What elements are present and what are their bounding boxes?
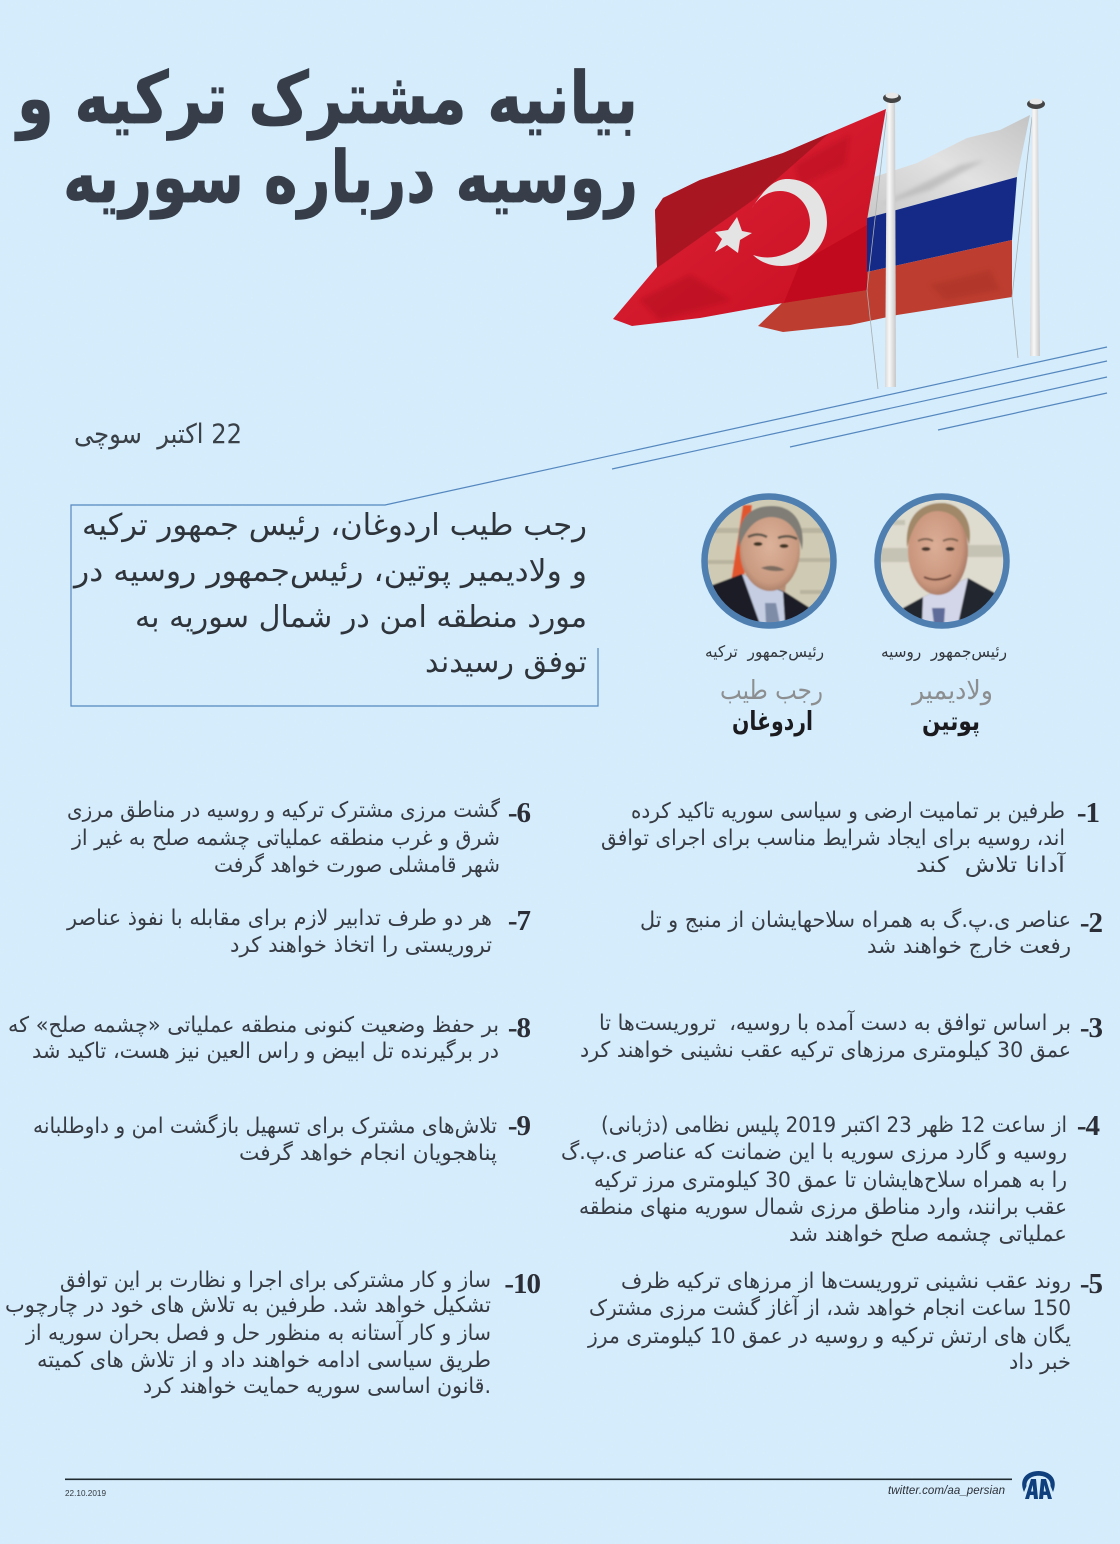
item 4: عقب برانند، وارد مناطق مرزی شمال سوریه منهای منطقه xyxy=(579,1195,1067,1220)
flag: Russia xyxy=(758,115,1030,332)
item 1 xyxy=(601,797,1099,878)
item 10: ساز و کار مشترکی برای اجرا و نظارت بر این توافق xyxy=(60,1268,491,1293)
icon: Anadolu Agency logo xyxy=(1022,1471,1055,1499)
item 2 xyxy=(640,907,1102,959)
item 5: یگان های ارتش ترکیه و روسیه در عمق 10 کیلومتری مرز xyxy=(587,1323,1071,1349)
item 6 xyxy=(67,797,530,878)
item 9 xyxy=(33,1110,530,1166)
intro text block: رجب طیب اردوغان، رئیس جمهور ترکیه xyxy=(82,508,587,543)
item 5 xyxy=(587,1268,1102,1375)
item 5: -5 xyxy=(1080,1268,1102,1300)
caption: Erdogan: رجب طیب xyxy=(720,676,823,706)
item 1: طرفین بر تمامیت ارضی و سیاسی سوریه تاکید کرده xyxy=(631,799,1065,824)
item 8: بر حفظ وضعیت کنونی منطقه عملیاتی «چشمه صلح» که xyxy=(8,1013,499,1038)
footer date: 22.10.2019 xyxy=(65,1488,106,1498)
caption: Putin: ولادیمیر xyxy=(910,676,993,706)
date line: 22 اکتبر سوچی xyxy=(74,419,242,450)
intro text block: و ولادیمیر پوتین، رئیس‌جمهور روسیه در xyxy=(72,554,587,589)
item 10: تشکیل خواهد شد. طرفین به تلاش های خود در چارچوب xyxy=(5,1293,491,1318)
item 2: -2 xyxy=(1080,907,1102,939)
title xyxy=(15,56,638,220)
item 6: -6 xyxy=(508,797,530,829)
item 1: -1 xyxy=(1077,797,1099,829)
footer rule xyxy=(65,1478,1012,1480)
item 2: رفعت خارج خواهند شد xyxy=(867,934,1071,959)
intro text block: مورد منطقه امن در شمال سوریه به xyxy=(135,600,587,635)
item 5: 150 ساعت انجام خواهد شد، از آغاز گشت مرزی مشترک xyxy=(589,1294,1071,1321)
flagpole ropes xyxy=(867,112,1032,389)
item 1: آدانا تلاش کند xyxy=(916,851,1066,878)
caption: Erdogan xyxy=(705,642,824,737)
caption: Erdogan: اردوغان xyxy=(732,707,813,737)
caption: Putin: رئیس‌جمهور روسیه xyxy=(881,642,1007,662)
item 9: پناهجویان انجام خواهد گرفت xyxy=(239,1140,497,1166)
item 10: -10 xyxy=(504,1268,540,1300)
decorative flag illustration: Russia and Turkey xyxy=(613,92,1045,389)
item 9: تلاش‌های مشترک برای تسهیل بازگشت امن و داوطلبانه xyxy=(33,1113,497,1139)
footer social handle: twitter.com/aa_persian xyxy=(888,1485,1005,1497)
item 4: روسیه و گارد مرزی سوریه با این ضمانت که عناصر ی.پ.گ xyxy=(561,1139,1067,1165)
portrait: Erdogan xyxy=(700,495,840,640)
item 4: از ساعت 12 ظهر 23 اکتبر 2019 پلیس نظامی (دژبانی) xyxy=(601,1113,1067,1138)
item 8 xyxy=(8,1012,530,1064)
item 5: روند عقب نشینی تروریست‌ها از مرزهای ترکیه ظرف xyxy=(621,1269,1071,1294)
item 6: شهر قامشلی صورت خواهد گرفت xyxy=(214,852,500,878)
item 4: عملیاتی چشمه صلح خواهند شد xyxy=(789,1222,1067,1247)
item 7: هر دو طرف تدابیر لازم برای مقابله با نفوذ عناصر xyxy=(66,906,492,931)
item 8: در برگیرنده تل ابیض و راس العین نیز هست، تاکید شد xyxy=(32,1038,499,1064)
item 2: عناصر ی.پ.گ به همراه سلاحهایشان از منبج و تل xyxy=(640,907,1071,933)
item 10: ساز و کار آستانه به منظور حل و فصل بحران سوریه از xyxy=(25,1319,491,1346)
caption: Putin xyxy=(881,642,1007,737)
item 7 xyxy=(66,905,530,958)
item 6: گشت مرزی مشترک ترکیه و روسیه در مناطق مرزی xyxy=(67,797,501,823)
item 3: عمق 30 کیلومتری مرزهای ترکیه عقب نشینی خواهند کرد xyxy=(580,1038,1071,1063)
item 3: -3 xyxy=(1080,1012,1102,1044)
title: روسیه درباره سوریه xyxy=(63,135,638,220)
item 8: -8 xyxy=(508,1012,530,1044)
flagpole: right xyxy=(1027,98,1045,356)
title: بیانیه مشترک ترکیه و xyxy=(15,56,638,141)
item 5: خبر داد xyxy=(1009,1350,1071,1375)
item 4: -4 xyxy=(1077,1110,1099,1142)
item 7: -7 xyxy=(508,905,530,937)
caption: Erdogan: رئیس‌جمهور ترکیه xyxy=(705,642,824,662)
item 4: را به همراه سلاح‌هایشان تا عمق 30 کیلومتری مرز ترکیه xyxy=(594,1168,1067,1193)
item 10: طریق سیاسی ادامه خواهند داد و از تلاش های کمیته xyxy=(37,1348,491,1373)
item 1: اند، روسیه برای ایجاد شرایط مناسب برای اجرای توافق xyxy=(601,826,1065,851)
flagpole: left xyxy=(883,92,901,387)
item 4 xyxy=(561,1110,1099,1247)
item 3: بر اساس توافق به دست آمده با روسیه، تروریست‌ها تا xyxy=(599,1009,1071,1036)
item 7: تروریستی را اتخاذ خواهند کرد xyxy=(230,933,492,958)
item 9: -9 xyxy=(508,1110,530,1142)
caption: Putin: پوتین xyxy=(922,707,980,737)
flag: Turkey xyxy=(613,105,886,326)
intro text block: توفق رسیدند xyxy=(425,645,587,680)
portrait: Putin xyxy=(875,495,1015,640)
item 6: شرق و غرب منطقه عملیاتی چشمه صلح به غیر از xyxy=(71,826,500,851)
intro text block xyxy=(72,508,587,680)
item 3 xyxy=(580,1009,1102,1063)
item 10: .قانون اساسی سوریه حمایت خواهند کرد xyxy=(143,1374,491,1399)
item 10 xyxy=(5,1268,540,1399)
